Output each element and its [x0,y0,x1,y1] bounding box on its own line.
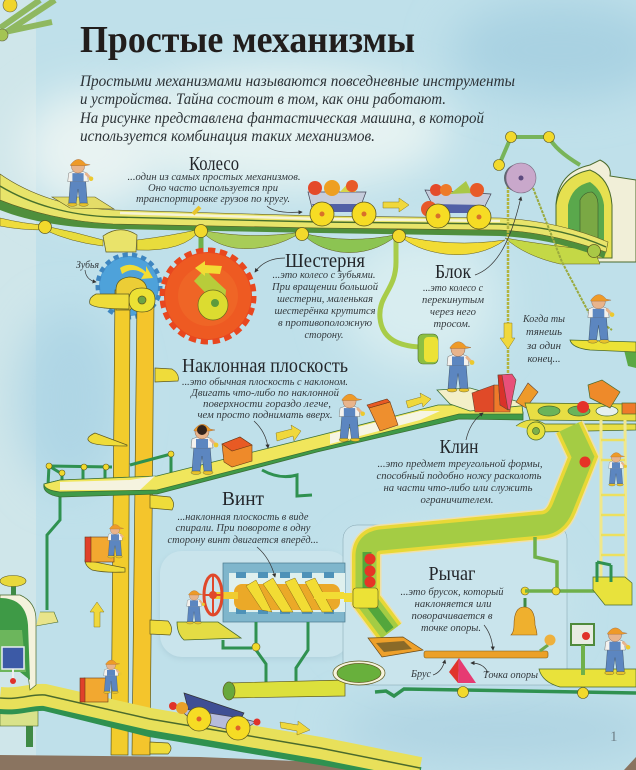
big green pipe [366,427,583,632]
lever description: точке опоры. [421,622,481,634]
worker: on block platform [447,342,474,392]
wedge description: способный подобно ножу расколоть [376,470,542,482]
ladder stand [593,562,632,605]
arrow to wedge [466,413,483,440]
intro text [79,73,515,145]
screw housing [223,563,378,622]
wheel description: транспортировке грузов по кругу. [136,193,290,205]
worker: girl on ramp [191,424,218,474]
pivots [38,220,600,258]
press base and foot [0,708,38,747]
wheel heading: Колесо [189,153,239,175]
lever [368,634,556,683]
wheel operator platform [52,197,114,209]
note: pulling rope: Когда ты [522,313,565,325]
worker: rope puller [588,295,614,343]
gear description: сторону. [304,329,344,341]
label Zubya: Зубья [76,259,99,271]
worker: at screw wheel [187,590,205,624]
green pipes right [375,537,636,696]
intro text: Простыми механизмами называются повседневные инструменты [79,73,515,90]
gear description: шестерни, маленькая [277,293,373,305]
wedge description: ...это предмет треугольной формы, [378,458,543,470]
upper rail [0,174,608,258]
note: pulling rope: за один [526,340,562,352]
gear description [271,269,378,341]
orange boxes [80,399,398,702]
wedge description: ограничителем. [420,494,494,506]
worker: second on ramp [339,394,365,442]
wheel description: Оно часто используется при [148,182,278,194]
arrow to pulley [475,197,521,275]
pulley description [422,282,484,330]
inclined plane description: Двигать что-либо по наклонной [190,387,339,399]
ladder [601,420,626,585]
press machine [0,576,58,690]
label: inclined plane [182,355,348,421]
red balls [364,456,590,588]
screw description: спирали. При повороте в одну [176,522,311,534]
screw heading: Винт [222,488,264,510]
arrow to fulcrum [471,663,488,673]
lever and screw panels [160,525,567,685]
wedge description [376,458,543,506]
label: fulcrum: Точка опоры [483,669,539,681]
arrow to red gear [255,258,285,272]
page number: 1 [610,729,618,745]
worker: with box below [104,660,122,694]
worker: with box on shelf [108,524,126,558]
wheel description [128,171,300,205]
note: pulling rope: конец... [528,353,560,365]
pulley description: перекинутым [422,294,484,306]
arrow: rope down [500,323,515,349]
lower cart [169,693,260,740]
bell [511,587,537,635]
intro text: и устройства. Тайна состоит в том, как они работают. [80,91,446,108]
arrow: cart direction [383,198,409,212]
screw description [168,511,318,546]
button and platform [539,624,636,687]
wedge description: на части что-либо или служить [384,482,532,494]
yellow columns [111,277,155,755]
label: screw [168,488,318,546]
gear description: При вращении большой [271,281,378,293]
wheel description: ...один из самых простых механизмов. [128,171,300,183]
wedge heading: Клин [440,436,479,458]
gear description: ...это колесо с зубьями. [272,269,376,281]
pulley description: тросом. [434,318,470,330]
label: gear [271,250,378,341]
arrow to ramp [254,421,268,448]
screw description: сторону винт двигается вперёд... [168,534,318,546]
worker: on ladder [609,452,627,486]
pulley heading: Блок [435,261,471,283]
green railing [47,454,171,610]
wedge cubes [472,374,538,412]
worker platform right [570,340,636,368]
table edge at bottom [0,755,636,770]
pulley assembly [494,132,612,380]
gear description: шестерёнка крутится [274,305,376,317]
arch building [556,160,636,262]
yellow direction arrows [90,393,431,735]
screw platform [177,622,308,682]
lower rail [0,695,420,770]
pivots on lower pipe [458,587,588,698]
note: pulling rope: тянешь [526,326,562,338]
pulley description: через него [430,306,476,318]
rail swags [0,218,600,264]
arrow to lever [484,625,493,650]
title: Простые механизмы [80,19,415,61]
screw description: ...наклонная плоскость в виде [178,511,309,523]
wheel cart one [308,180,376,226]
inclined plane description [182,376,348,421]
red gear [164,252,252,340]
block platform [437,388,530,411]
lever description: поворачивается в [412,610,493,622]
funnel pipe [223,661,385,700]
corner struts [0,0,55,41]
note: pulling rope [522,313,565,365]
lever description [400,586,504,634]
ramp connector pipe [262,470,312,496]
worker: at button [605,628,630,675]
intro text: На рисунке представлена фантастическая машина, в которой [79,110,484,127]
lever description: наклоняется или [414,598,492,610]
inclined plane [44,405,523,497]
perforated bar [516,380,636,440]
lever description: ...это брусок, который [400,586,504,598]
top bearing block [103,230,137,252]
gear description: в противоположную [278,317,372,329]
inclined plane description: ...это обычная плоскость с наклоном. [182,376,348,388]
intro text: используется комбинация таких механизмов. [80,128,375,145]
arrow to bar [433,660,445,675]
label: wheel [128,153,300,205]
pulley description: ...это колесо с [423,282,483,294]
label: pulley [422,261,484,330]
inclined plane description: поверхности гораздо легче, [203,398,331,410]
label: bar: Брус [410,668,431,680]
inclined plane description: чем просто поднимать вверх. [198,409,332,421]
inclined plane heading: Наклонная плоскость [182,355,348,377]
red handwheel [204,575,238,615]
label: wedge [376,436,543,506]
worker: wheel operator [68,159,93,206]
gear heading: Шестерня [285,250,365,272]
arrow to screw [257,547,275,577]
arrow to cart [267,206,302,212]
block on wall [418,334,438,364]
label: lever [400,563,504,634]
bar connectors under the rail [201,231,420,347]
column shelves [85,294,178,754]
arrow to teeth [85,270,96,282]
blue gear [99,256,159,316]
railing knobs [46,451,174,476]
lever heading: Рычаг [428,563,476,585]
wheel cart two [421,181,491,229]
